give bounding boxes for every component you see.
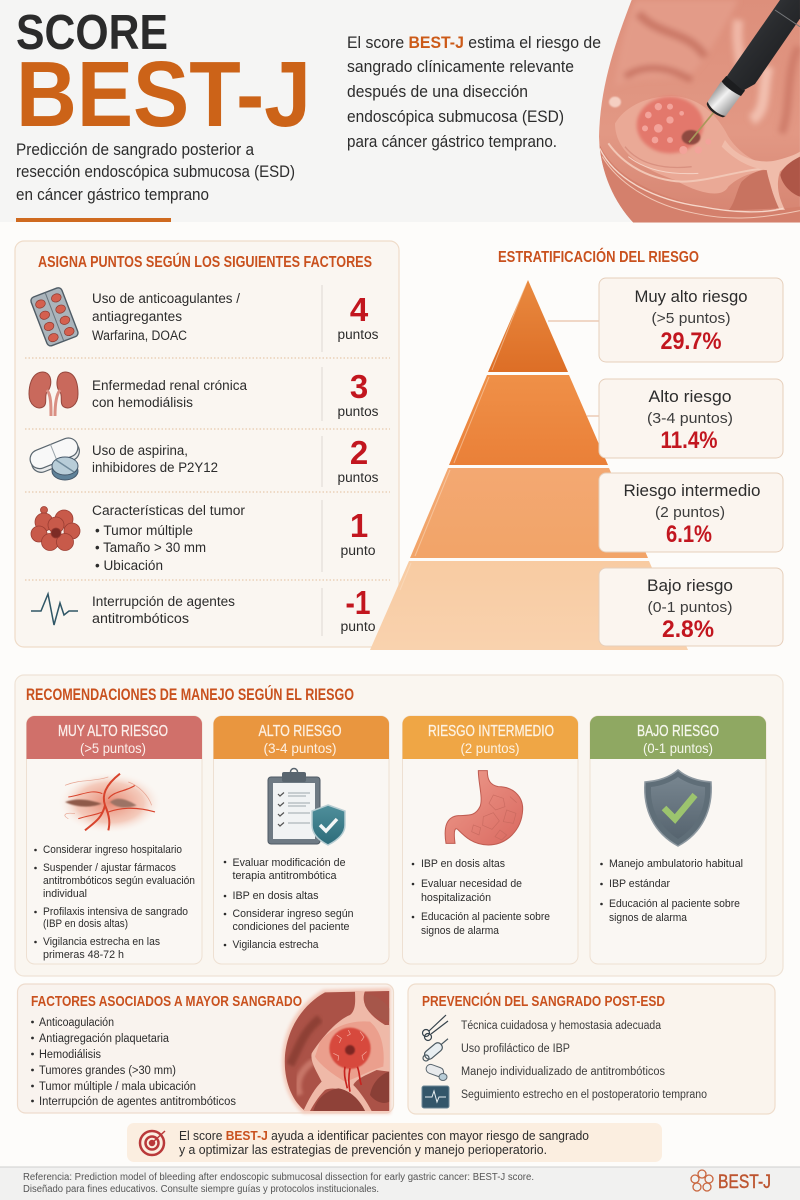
card bullets bbox=[224, 857, 354, 951]
card: alto riesgo: ALTO RIESGO bbox=[258, 723, 342, 740]
row: enfermedad renal: Enfermedad renal crónica bbox=[92, 378, 247, 393]
row: aspirina: puntos bbox=[338, 470, 379, 485]
card bullets: signos de alarma bbox=[421, 925, 500, 937]
subtitle: en cáncer gástrico temprano bbox=[16, 185, 209, 204]
row: interrupción: punto bbox=[340, 619, 376, 634]
card bullets: Evaluar modificación de bbox=[232, 857, 346, 869]
panel heading: RECOMENDACIONES DE MANEJO SEGÚN EL RIESGO bbox=[26, 685, 354, 704]
risk card: alto: 11.4% bbox=[660, 427, 718, 454]
risk pyramid bbox=[370, 280, 688, 650]
card: riesgo intermedio: RIESGO INTERMEDIO bbox=[428, 723, 554, 740]
icon: blister pack bbox=[30, 287, 79, 347]
reference text: Referencia: Prediction model of bleeding after endoscopic submucosal dissection for early gastric cancer: BEST-J score. bbox=[23, 1172, 534, 1183]
row: anticoagulantes: antiagregantes bbox=[92, 309, 182, 324]
risk card: alto: (3-4 puntos) bbox=[647, 410, 733, 427]
icon: syringe bbox=[423, 1035, 451, 1061]
subtitle bbox=[16, 140, 295, 204]
prevention list: Seguimiento estrecho en el postoperatorio temprano bbox=[461, 1089, 707, 1101]
card: muy alto riesgo: MUY ALTO RIESGO bbox=[58, 723, 168, 740]
icon: stomach bbox=[445, 771, 523, 845]
card bullets: Educación al paciente sobre bbox=[421, 911, 550, 923]
row dividers bbox=[25, 358, 390, 580]
card bullets: IBP en dosis altas bbox=[232, 890, 319, 902]
title accent bar bbox=[16, 218, 171, 222]
row: interrupción: antitrombóticos bbox=[92, 611, 189, 626]
card bullets: Evaluar necesidad de bbox=[421, 878, 522, 890]
logo: BEST-J bbox=[718, 1172, 771, 1193]
row: aspirina bbox=[27, 434, 379, 485]
card bullets bbox=[412, 858, 550, 937]
card bullets: IBP estándar bbox=[609, 878, 670, 890]
card bullets: Considerar ingreso según bbox=[232, 908, 354, 920]
intro text: después de una disección bbox=[347, 83, 528, 101]
title: SCORE bbox=[16, 6, 168, 60]
illustration: bleeding tissue bbox=[58, 772, 162, 833]
row: anticoagulantes: Warfarina, DOAC bbox=[92, 328, 187, 343]
row: tumor bbox=[31, 503, 376, 573]
card: bajo riesgo: (0-1 puntos) bbox=[643, 740, 713, 756]
risk card: bajo bbox=[599, 568, 783, 646]
intro text: sangrado clínicamente relevante bbox=[347, 58, 574, 76]
card bullets: antitrombóticos según evaluación bbox=[43, 875, 195, 887]
lesion bbox=[637, 97, 703, 153]
card bullets: Educación al paciente sobre bbox=[609, 898, 740, 910]
card: alto riesgo: (3-4 puntos) bbox=[264, 740, 336, 756]
factor list: Anticoagulación bbox=[39, 1017, 114, 1029]
row: tumor: punto bbox=[340, 543, 376, 558]
panel heading: FACTORES ASOCIADOS A MAYOR SANGRADO bbox=[31, 993, 302, 1010]
row: enfermedad renal bbox=[29, 368, 379, 419]
title: BEST-J bbox=[16, 42, 311, 146]
prevention list: Técnica cuidadosa y hemostasia adecuada bbox=[461, 1020, 662, 1032]
card bullets: Profilaxis intensiva de sangrado bbox=[43, 906, 188, 918]
icon: kidneys bbox=[29, 372, 78, 416]
factor list: Tumores grandes (>30 mm) bbox=[39, 1065, 176, 1077]
row: aspirina: Uso de aspirina, bbox=[92, 443, 188, 458]
card bullets bbox=[600, 858, 743, 924]
logo bbox=[691, 1170, 771, 1193]
card: riesgo intermedio: (2 puntos) bbox=[460, 740, 520, 756]
risk card: bajo: 2.8% bbox=[662, 616, 714, 643]
reference text bbox=[23, 1172, 534, 1195]
icon: target bbox=[140, 1131, 165, 1155]
ridges bbox=[303, 991, 389, 1111]
card bullets: individual bbox=[43, 888, 87, 900]
card: bajo riesgo: BAJO RIESGO bbox=[637, 723, 719, 740]
card: bajo riesgo bbox=[590, 716, 766, 964]
row: enfermedad renal: con hemodiálisis bbox=[92, 395, 193, 410]
prevention list: Manejo individualizado de antitrombóticos bbox=[461, 1066, 665, 1078]
risk card: intermedio: Riesgo intermedio bbox=[624, 481, 760, 500]
risk card: alto: Alto riesgo bbox=[648, 387, 732, 406]
row: tumor: 1 bbox=[350, 507, 368, 544]
risk card: alto bbox=[599, 379, 783, 458]
row: tumor: • Tumor múltiple bbox=[95, 523, 193, 538]
intro text: para cáncer gástrico temprano. bbox=[347, 133, 557, 151]
callout: conclusión: El score BEST-J ayuda a identificar pacientes con mayor riesgo de sangrado bbox=[179, 1129, 589, 1143]
card: riesgo intermedio bbox=[402, 716, 578, 964]
mound bbox=[615, 96, 772, 193]
row: aspirina: inhibidores de P2Y12 bbox=[92, 460, 218, 475]
header band bbox=[0, 0, 800, 223]
row: interrupción bbox=[31, 584, 376, 634]
row: enfermedad renal: puntos bbox=[338, 404, 379, 419]
factor list: Tumor múltiple / mala ubicación bbox=[39, 1081, 196, 1093]
intro text bbox=[347, 34, 601, 151]
vessels bbox=[329, 1028, 371, 1069]
card bullets: primeras 48-72 h bbox=[43, 949, 124, 961]
risk card: bajo: (0-1 puntos) bbox=[648, 599, 733, 616]
reference text: Diseñado para fines educativos. Consulte siempre guías y protocolos institucionales. bbox=[23, 1184, 379, 1195]
card bullets: terapia antitrombótica bbox=[232, 870, 337, 882]
endoscope instrument bbox=[689, 0, 800, 142]
row: enfermedad renal: 3 bbox=[350, 368, 368, 405]
icon: tumor bbox=[31, 506, 80, 550]
card bullets: IBP en dosis altas bbox=[421, 858, 505, 870]
footer bbox=[0, 1167, 800, 1200]
panel heading: ASIGNA PUNTOS SEGÚN LOS SIGUIENTES FACTORES bbox=[38, 253, 372, 271]
lower wall bbox=[599, 143, 800, 223]
callout: conclusión bbox=[127, 1123, 662, 1162]
risk card: muy alto: (>5 puntos) bbox=[652, 310, 731, 327]
row: aspirina: 2 bbox=[350, 434, 368, 471]
panel heading: PREVENCIÓN DEL SANGRADO POST-ESD bbox=[422, 992, 665, 1010]
row: anticoagulantes: puntos bbox=[338, 327, 379, 342]
row: interrupción: -1 bbox=[346, 584, 370, 621]
card: alto riesgo bbox=[214, 716, 389, 964]
risk card: bajo: Bajo riesgo bbox=[647, 576, 733, 595]
card: muy alto riesgo bbox=[26, 716, 202, 964]
panel: recomendaciones de manejo bbox=[15, 675, 783, 976]
icon: ecg line bbox=[31, 594, 78, 625]
factor list: Antiagregación plaquetaria bbox=[39, 1033, 170, 1045]
card bullets bbox=[34, 844, 195, 961]
row: anticoagulantes bbox=[30, 287, 379, 347]
icon: small pills bbox=[425, 1063, 447, 1080]
risk card: muy alto: 29.7% bbox=[660, 328, 722, 355]
card bullets: Considerar ingreso hospitalario bbox=[43, 844, 182, 856]
panel: prevención del sangrado bbox=[408, 984, 775, 1114]
risk card: muy alto bbox=[599, 278, 783, 362]
factor list: Hemodiálisis bbox=[39, 1049, 101, 1061]
illustration: bleeding lesion bbox=[280, 988, 392, 1114]
card: muy alto riesgo: (>5 puntos) bbox=[80, 740, 146, 756]
factor list: Interrupción de agentes antitrombóticos bbox=[39, 1096, 236, 1108]
heading: estratificación del riesgo: ESTRATIFICACIÓN DEL RIESGO bbox=[498, 248, 699, 266]
risk card: intermedio: (2 puntos) bbox=[655, 504, 725, 521]
card bullets: Manejo ambulatorio habitual bbox=[609, 858, 743, 870]
icon: monitor bbox=[422, 1086, 449, 1108]
callout: conclusión: y a optimizar las estrategias de prevención y manejo perioperatorio. bbox=[179, 1143, 547, 1157]
row: tumor: Características del tumor bbox=[92, 503, 246, 518]
icon: pills bbox=[27, 435, 82, 480]
card bullets: signos de alarma bbox=[609, 912, 688, 924]
subtitle: Predicción de sangrado posterior a bbox=[16, 140, 254, 159]
row: tumor: • Ubicación bbox=[95, 558, 163, 573]
card bullets: condiciones del paciente bbox=[232, 921, 350, 933]
intro text: endoscópica submucosa (ESD) bbox=[347, 108, 564, 126]
icon: clipboard with shield bbox=[268, 768, 345, 845]
prevention list: Uso profiláctico de IBP bbox=[461, 1043, 570, 1055]
row: anticoagulantes: 4 bbox=[350, 291, 369, 328]
row: tumor: • Tamaño > 30 mm bbox=[95, 540, 206, 555]
card bullets: (IBP en dosis altas) bbox=[43, 918, 128, 930]
prevention list bbox=[461, 1020, 707, 1101]
title bbox=[16, 6, 311, 146]
icon: scissors bbox=[422, 1015, 448, 1040]
card bullets: hospitalización bbox=[421, 892, 491, 904]
intro text: El score BEST-J estima el riesgo de bbox=[347, 34, 601, 52]
illustration: endoscope in gastric mucosa bbox=[595, 0, 800, 223]
card bullets: Vigilancia estrecha en las bbox=[43, 936, 160, 948]
panel: factores asociados bbox=[18, 984, 394, 1114]
row: interrupción: Interrupción de agentes bbox=[92, 594, 235, 609]
icon: shield with check bbox=[645, 770, 711, 846]
factor list bbox=[31, 1017, 236, 1108]
risk card: intermedio: 6.1% bbox=[666, 521, 712, 548]
risk card: muy alto: Muy alto riesgo bbox=[634, 287, 748, 306]
row: anticoagulantes: Uso de anticoagulantes / bbox=[92, 291, 240, 306]
card bullets: Suspender / ajustar fármacos bbox=[43, 862, 176, 874]
card bullets: Vigilancia estrecha bbox=[232, 939, 319, 951]
panel: factores y puntos bbox=[15, 241, 399, 647]
ridge and hollows bbox=[722, 140, 800, 210]
subtitle: resección endoscópica submucosa (ESD) bbox=[16, 162, 295, 181]
risk card: intermedio bbox=[599, 473, 783, 552]
